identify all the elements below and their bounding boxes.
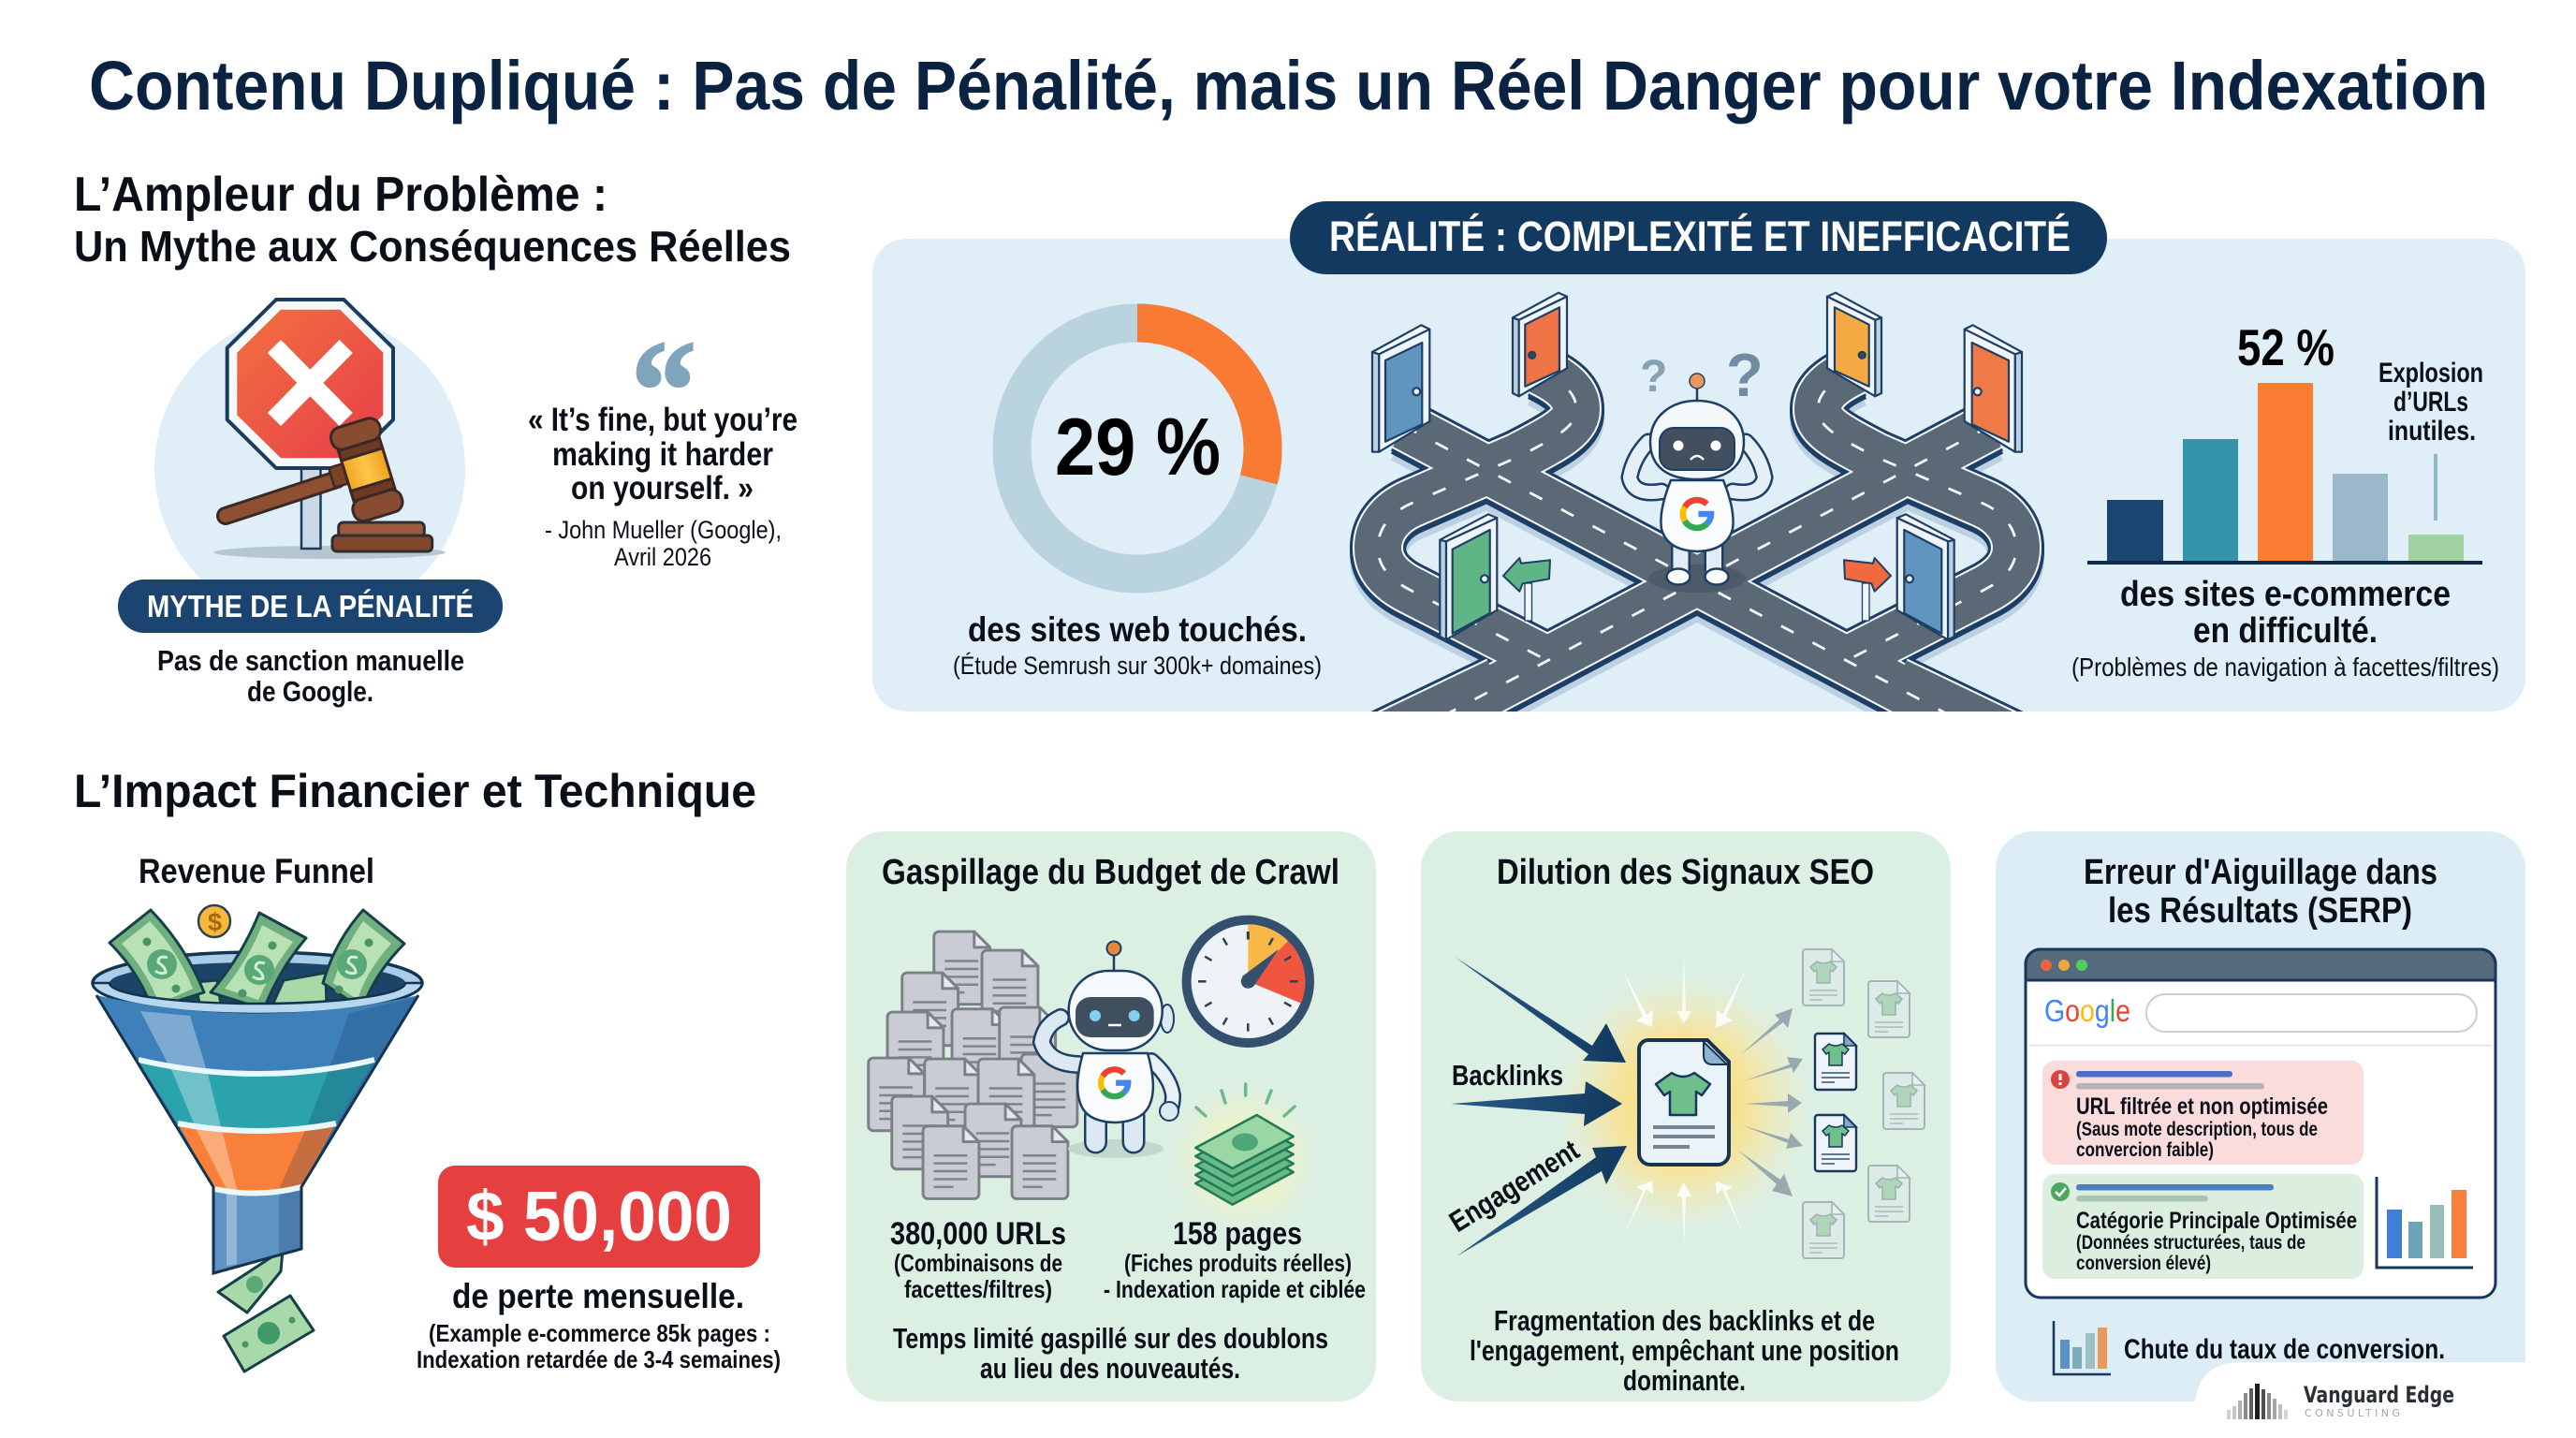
- callout: $ 50,000: [438, 1166, 760, 1268]
- icon: door orange right: [1965, 325, 2022, 452]
- stat: 380,000 urls: [890, 1216, 1066, 1303]
- panel heading: Dilution des Signaux SEO: [1497, 853, 1874, 892]
- icon: door amber top right: [1827, 293, 1881, 396]
- pill: mythe de la pénalité: MYTHE DE LA PÉNALITÉ: [147, 589, 474, 624]
- icon: door blue top left: [1372, 325, 1429, 452]
- quote text: - John Mueller (Google),: [545, 516, 782, 544]
- stat: 380,000 urls: facettes/filtres): [904, 1275, 1052, 1303]
- heading: impact financier et technique: L’Impact Financier et Technique: [74, 765, 756, 817]
- illustration: road maze: [1348, 371, 2046, 763]
- text: des sites web touchés: des sites web touchés.: [968, 610, 1307, 649]
- caption: pas de sanction: de Google.: [247, 675, 373, 708]
- banner: réalité complexité et inefficacité: RÉALITÉ : COMPLEXITÉ ET INEFFICACITÉ: [1329, 213, 2071, 260]
- quote text: Avril 2026: [614, 543, 711, 571]
- result: url filtrée: URL filtrée et non optimisée: [2076, 1093, 2328, 1120]
- text: perte mensuelle: de perte mensuelle.: [452, 1277, 744, 1315]
- illustration: revenue funnel with bills: [93, 905, 422, 1372]
- quote text: [528, 402, 798, 571]
- callout: $ 50,000: $ 50,000: [466, 1177, 732, 1255]
- caption: pas de sanction: Pas de sanction manuelle: [157, 644, 464, 677]
- panel conclusion text: Fragmentation des backlinks et de: [1494, 1304, 1875, 1337]
- chart annotation: explosion d'urls: inutiles.: [2388, 416, 2476, 447]
- text: des sites web touchés: (Étude Semrush sur 300k+ domaines): [953, 652, 1322, 680]
- google logo: Google: [2044, 993, 2130, 1028]
- pill: mythe de la pénalité: [118, 580, 503, 633]
- heading: l'ampleur du problème: Un Mythe aux Conséquences Réelles: [74, 222, 791, 271]
- stat: 158 pages: - Indexation rapide et ciblée: [1104, 1275, 1366, 1303]
- icons: faded duplicate documents: [1803, 949, 1925, 1258]
- bills in funnel: [110, 910, 404, 1011]
- panel conclusion text: dominante.: [1623, 1364, 1746, 1397]
- heading: revenue funnel: Revenue Funnel: [139, 852, 374, 890]
- chart annotation: explosion d'urls: Explosion: [2378, 358, 2483, 389]
- label: engagement: Engagement: [1443, 1134, 1585, 1239]
- heading: l'ampleur du problème: L’Ampleur du Problème :: [74, 168, 607, 222]
- arrow: backlinks 1: [1455, 957, 1626, 1063]
- text: des sites web touchés: [953, 610, 1322, 680]
- panel: réalité: [872, 239, 2525, 763]
- heading: l'ampleur du problème: [74, 168, 791, 271]
- quote text: on yourself. »: [571, 470, 754, 506]
- icon: door blue right with right arrow: [1844, 514, 1954, 639]
- donut chart: 29 %: 29 %: [1055, 403, 1221, 492]
- stat: 380,000 urls: 380,000 URLs: [890, 1216, 1066, 1252]
- panel conclusion text: [893, 1322, 1328, 1385]
- funnel body: [96, 995, 418, 1273]
- logo: vanguard edge consulting: CONSULTING: [2305, 1407, 2400, 1419]
- result: url filtrée: (Saus mote description, tous de: [2076, 1119, 2318, 1140]
- result: catégorie optimisée: (Données structurées, taus de: [2076, 1232, 2305, 1254]
- logo: vanguard edge consulting: Vanguard Edge: [2304, 1382, 2454, 1408]
- icon: google robot: [1042, 942, 1178, 1158]
- quote text: « It’s fine, but you’re: [528, 402, 798, 438]
- icon: confused google robot: [1630, 341, 1764, 593]
- panel: dilution des signaux seo: [1421, 831, 1951, 1401]
- illustration: stop sign and gavel: [154, 300, 465, 624]
- icon: confused google robot: ?: [1726, 341, 1764, 409]
- text: sites e-commerce en difficulté: [2071, 575, 2499, 682]
- text: perte mensuelle: [417, 1277, 781, 1373]
- icon: stack of cash: [1172, 1084, 1318, 1232]
- stat: 158 pages: (Fiches produits réelles): [1124, 1249, 1352, 1277]
- panel heading: Gaspillage du Budget de Crawl: [882, 853, 1339, 892]
- donut chart: 29 %: [1012, 323, 1263, 574]
- panel heading: Erreur d'Aiguillage dans: [2084, 853, 2437, 892]
- mini bar chart: [2377, 1177, 2473, 1268]
- result: url filtrée: [2042, 1061, 2364, 1165]
- chart annotation: explosion d'urls: [2378, 358, 2483, 447]
- icon: door orange top left: [1513, 293, 1567, 396]
- caption: pas de sanction: [157, 644, 464, 708]
- bar chart: 52 %: [2087, 318, 2482, 565]
- chart annotation: explosion d'urls: d’URLs: [2393, 387, 2468, 418]
- arrow: engagement: [1456, 1146, 1627, 1256]
- icon: coin: [198, 905, 230, 937]
- text: perte mensuelle: (Example e-commerce 85k pages :: [429, 1319, 770, 1347]
- gray outward arrows: [1737, 1008, 1803, 1196]
- icon: central document with shirt: [1639, 1040, 1729, 1165]
- quote mark icon: “: [631, 312, 696, 469]
- icon: coin: $: [208, 908, 222, 936]
- icon: confused google robot: ?: [1640, 352, 1667, 402]
- bar chart: 52 %: 52 %: [2237, 318, 2334, 376]
- quote text: making it harder: [552, 436, 773, 473]
- icon: door green with left arrow: [1440, 514, 1550, 639]
- panel: erreur d'aiguillage: [1996, 831, 2525, 1401]
- icons: highlighted duplicate documents: [1815, 1034, 1856, 1171]
- stat: 380,000 urls: (Combinaisons de: [894, 1249, 1062, 1277]
- result: catégorie optimisée: Catégorie Principale Optimisée: [2076, 1208, 2357, 1234]
- logo: vanguard edge consulting: [2194, 1362, 2539, 1419]
- result: catégorie optimisée: conversion élevé): [2076, 1253, 2211, 1274]
- stat: 158 pages: 158 pages: [1173, 1216, 1302, 1252]
- text: chute du taux de conversion: Chute du taux de conversion.: [2124, 1334, 2445, 1365]
- browser window: [2026, 949, 2496, 1298]
- glow behind document: [1557, 976, 1809, 1229]
- text: sites e-commerce en difficulté: des sites e-commerce: [2120, 575, 2451, 614]
- panel heading: [2084, 853, 2437, 931]
- banner: réalité complexité et inefficacité: [1290, 201, 2107, 274]
- text: sites e-commerce en difficulté: (Problèmes de navigation à facettes/filtres): [2071, 653, 2499, 682]
- icon: stopwatch clock: [1187, 920, 1310, 1043]
- text: perte mensuelle: Indexation retardée de 3-4 semaines): [417, 1345, 781, 1373]
- panel conclusion text: l'engagement, empêchant une position: [1470, 1334, 1899, 1367]
- panel conclusion text: au lieu des nouveautés.: [980, 1352, 1240, 1385]
- panel conclusion text: Temps limité gaspillé sur des doublons: [893, 1322, 1328, 1355]
- panel conclusion text: [1470, 1304, 1899, 1397]
- label: backlinks: Backlinks: [1452, 1059, 1563, 1092]
- stat: 158 pages: [1104, 1216, 1366, 1303]
- result: catégorie optimisée: [2042, 1174, 2364, 1279]
- arrow: backlinks 2: [1451, 1081, 1622, 1126]
- search box: [2146, 994, 2477, 1032]
- bills falling out: [218, 1250, 314, 1372]
- text: sites e-commerce en difficulté: en difficulté.: [2193, 611, 2378, 651]
- panel heading: les Résultats (SERP): [2108, 891, 2412, 931]
- icon: conversion chart: [2054, 1321, 2111, 1374]
- panel: gaspillage du budget de crawl: [846, 831, 1376, 1401]
- white inward arrows: [1622, 956, 1747, 1245]
- result: url filtrée: convercion faible): [2076, 1139, 2214, 1161]
- icon: pile of documents: [869, 932, 1077, 1198]
